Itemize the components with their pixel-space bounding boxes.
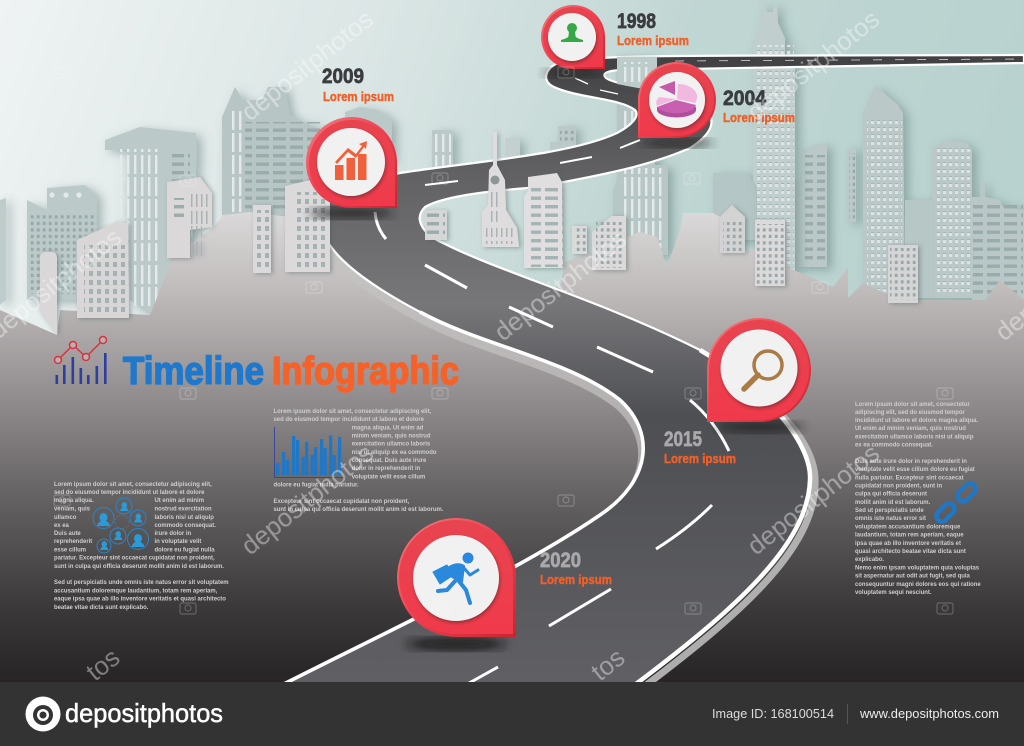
icon: running businessman bbox=[433, 552, 478, 603]
text block: left: ex ea bbox=[54, 523, 70, 529]
year label 2020: 2020 bbox=[540, 549, 581, 572]
text block: middle: magna aliqua. Ut enim ad bbox=[352, 426, 424, 432]
text block: right: explicabo. bbox=[855, 557, 884, 563]
footer logo: depositphotos bbox=[65, 698, 223, 728]
watermark text: tos bbox=[585, 642, 630, 687]
year label 2009: Lorem ipsum bbox=[323, 89, 394, 104]
text block: middle bbox=[274, 409, 444, 513]
bar chart icon bbox=[274, 427, 345, 478]
text block: middle: Excepteur sint occaecat cupidatat non proident, bbox=[274, 499, 409, 505]
footer image id: Image ID: 168100514 bbox=[712, 707, 834, 721]
text block: right: exercitation ullamco laboris nisi ut aliquip bbox=[855, 434, 974, 440]
year label 2009: 2009 bbox=[322, 65, 364, 88]
text block: left: reprehenderit bbox=[54, 539, 92, 545]
text block: middle: consequat. Duis aute irure bbox=[352, 458, 427, 464]
text block: left: commodo consequat. bbox=[154, 523, 216, 529]
year label 2015: Lorem ipsum bbox=[664, 451, 736, 466]
text block: right: culpa qui officia deserunt bbox=[855, 492, 927, 498]
text block: left: Duis aute bbox=[54, 531, 81, 537]
text block: middle: voluptate velit esse cillum bbox=[352, 474, 425, 480]
road left side shadow bbox=[271, 226, 642, 696]
text block: left: pariatur. Excepteur sint occaecat cupidatat non proident, bbox=[54, 556, 215, 562]
year label 2015: 2015 bbox=[664, 428, 702, 451]
building: wide tower bbox=[105, 127, 197, 315]
text block: right: sit aspernatur aut odit aut fugit, sed quia bbox=[855, 574, 970, 580]
title: Timeline: Timeline bbox=[123, 350, 264, 393]
footer logo bbox=[26, 696, 223, 732]
text block: left: accusantium doloremque laudantium, totam rem aperiam, bbox=[54, 588, 218, 594]
road right side shadow bbox=[633, 400, 815, 695]
building: between road bends bbox=[617, 57, 657, 90]
text block: right: consequuntur magni dolores eos qui ratione bbox=[855, 582, 981, 588]
tall central skyscraper bbox=[753, 3, 795, 283]
text block: right: omnis iste natus error sit bbox=[855, 516, 926, 522]
text block: left: nostrud exercitation bbox=[154, 506, 212, 512]
text block: middle: dolore eu fugiat nulla pariatur. bbox=[274, 482, 359, 488]
building: mid-right block bbox=[795, 143, 827, 267]
text block: left: Ut enim ad minim bbox=[154, 498, 204, 504]
text block: left: dolore eu fugiat nulla bbox=[154, 548, 215, 554]
year label 2020 bbox=[540, 549, 612, 587]
year label 2004: Lorem ipsum bbox=[723, 110, 795, 125]
building: light shard left bbox=[40, 252, 57, 335]
back skyline buildings bbox=[0, 57, 1024, 315]
text block: right: Lorem ipsum dolor sit amet, consectetur bbox=[855, 402, 971, 408]
text block: middle: dolor in reprehenderit in bbox=[352, 466, 421, 472]
text block: left: in voluptate velit bbox=[154, 539, 201, 545]
building: stepped office block bbox=[222, 87, 335, 215]
building: thin tower bbox=[847, 145, 856, 222]
text block: right: ex ea commodo consequat. bbox=[855, 442, 933, 448]
text block: right: ipsa quae ab illo inventore veritatis et bbox=[855, 541, 961, 547]
road lane markings bbox=[375, 59, 1024, 687]
watermark text: depositphotos bbox=[488, 224, 632, 347]
icon: title line and bar chart bbox=[54, 336, 107, 384]
text block: right: laudantium, totam rem aperiam, eaque bbox=[855, 532, 964, 538]
watermark text: tos bbox=[80, 642, 125, 687]
footer bar bbox=[0, 682, 1024, 746]
text block: left: sunt in culpa qui officia deserunt mollit anim id est laborum. bbox=[54, 564, 224, 570]
ground with paper skyline edge bbox=[0, 205, 1024, 690]
text block: left: sed do eiusmod tempor incididunt ut labore et dolore bbox=[54, 490, 205, 496]
building: light block mid-left bbox=[253, 205, 271, 273]
pin 2015 with magnifier icon bbox=[707, 318, 811, 433]
road surface bbox=[272, 55, 1024, 690]
building: light block by road bbox=[524, 173, 563, 268]
text block: left: esse cillum bbox=[54, 548, 86, 554]
text block: right: nulla pariatur. Excepteur sint occaecat bbox=[855, 476, 964, 482]
watermark camera marks bbox=[54, 67, 953, 614]
year label 2020: Lorem ipsum bbox=[540, 572, 612, 587]
text block: right: quasi architecto beatae vitae dicta sunt bbox=[855, 549, 966, 555]
pin 2004 with pie icon bbox=[638, 62, 716, 148]
road thick white edge left bbox=[272, 312, 643, 690]
building: light block by pin bbox=[285, 180, 330, 272]
building: right tower 2 bbox=[932, 140, 972, 298]
text block: left: Lorem ipsum dolor sit amet, consectetur adipiscing elit, bbox=[54, 482, 212, 488]
text block: left bbox=[54, 482, 229, 611]
year label 1998 bbox=[617, 10, 689, 48]
building: gabled house bbox=[720, 205, 745, 253]
text block: middle: sed do eiusmod tempor incididunt ut labore et dolore bbox=[274, 417, 425, 423]
title: Infographic: Infographic bbox=[272, 350, 459, 393]
heading block bbox=[54, 336, 459, 393]
year label 2009 bbox=[322, 65, 394, 104]
text block: right: Duis aute irure dolor in reprehenderit in bbox=[855, 459, 967, 465]
text block: right: Ut enim ad minim veniam, quis nostrud bbox=[855, 426, 966, 432]
text block: middle: minim veniam, quis nostrud bbox=[352, 434, 431, 440]
building: light block near tower bbox=[755, 220, 785, 286]
building: spire tower bbox=[482, 132, 519, 247]
text block: left: ullamco bbox=[54, 515, 77, 521]
building: far left edge bbox=[0, 198, 6, 305]
text block: middle: Lorem ipsum dolor sit amet, consectetur adipiscing elit, bbox=[274, 409, 432, 415]
building: behind 2009 pin bbox=[345, 107, 392, 160]
building: light block left bbox=[167, 177, 212, 258]
building: mid tower behind road bbox=[613, 57, 668, 255]
building: small right block bbox=[572, 216, 626, 270]
building: connecting mass right bbox=[905, 200, 935, 298]
text block: right: Nemo enim ipsam voluptatem quia voluptas bbox=[855, 566, 980, 572]
text block: middle: nisi ut aliquip ex ea commodo bbox=[352, 450, 437, 456]
text block: right: mollit anim id est laborum. bbox=[855, 500, 931, 506]
year label 2004 bbox=[723, 87, 795, 125]
text block: right bbox=[855, 402, 981, 596]
text block: left: Sed ut perspiciatis unde omnis iste natus error sit voluptatem bbox=[54, 580, 229, 586]
building: squat block bbox=[713, 173, 757, 240]
front buildings and paper cutouts bbox=[40, 57, 918, 335]
building: round-window block bbox=[27, 185, 97, 300]
text block: right: voluptatem accusantium doloremque bbox=[855, 524, 961, 530]
year label 2015 bbox=[664, 428, 736, 466]
text block: left: eaque ipsa quae ab illo inventore veritatis et quasi architecto bbox=[54, 596, 226, 602]
watermark text: depositphotos bbox=[235, 438, 379, 561]
text block: left: beatae vitae dicta sunt explicabo. bbox=[54, 605, 149, 611]
text block: left: veniam, quis bbox=[54, 506, 91, 512]
building: right pointed tower bbox=[863, 85, 905, 298]
text block: right: cupidatat non proident, sunt in bbox=[855, 484, 942, 490]
icon: person bbox=[561, 23, 583, 42]
text block: middle: sunt in culpa qui officia deserunt mollit anim id est laborum. bbox=[274, 507, 444, 513]
text block: left: magna aliqua. bbox=[54, 498, 94, 504]
road thick white edge right bbox=[628, 350, 810, 690]
building: slender tower centre bbox=[432, 130, 453, 175]
icon: pie chart bbox=[656, 81, 697, 118]
watermark text: depositphotos bbox=[741, 4, 885, 127]
year label 1998: Lorem ipsum bbox=[617, 33, 689, 48]
building: centre small bbox=[505, 126, 576, 165]
pin 1998 with person icon bbox=[541, 5, 605, 78]
icon: people network bbox=[93, 498, 148, 553]
text block: left: irure dolor in bbox=[154, 531, 191, 537]
watermark text: depositphotos bbox=[235, 4, 379, 127]
building: front slanted block bbox=[77, 222, 129, 318]
text block: right: incididunt ut labore et dolore magna aliqua. bbox=[855, 418, 978, 424]
watermark text: depositphotos bbox=[741, 438, 885, 561]
pin 2020 with runner icon bbox=[397, 518, 516, 651]
footer url: www.depositphotos.com bbox=[859, 707, 999, 721]
text block: middle: exercitation ullamco laboris bbox=[352, 442, 431, 448]
building: far right block bbox=[972, 182, 1024, 300]
year label 2004: 2004 bbox=[723, 87, 766, 110]
icon: rising bars bbox=[335, 141, 367, 180]
pin 2009 with bar chart icon bbox=[306, 117, 397, 219]
building: front right block bbox=[888, 245, 918, 303]
text block: right: adipiscing elit, sed do eiusmod tempor bbox=[855, 410, 966, 416]
building: small inner block bbox=[425, 210, 447, 240]
text block: right: Sed ut perspiciatis unde bbox=[855, 508, 924, 514]
icon: chain link bbox=[934, 481, 978, 524]
year label 1998: 1998 bbox=[617, 10, 656, 33]
text block: right: voluptate velit esse cillum dolore eu fugiat bbox=[855, 467, 975, 473]
text block: left: laboris nisi ut aliquip bbox=[154, 515, 214, 521]
text block: right: voluptatem sequi nesciunt. bbox=[855, 590, 932, 596]
icon: magnifier bbox=[744, 351, 782, 389]
